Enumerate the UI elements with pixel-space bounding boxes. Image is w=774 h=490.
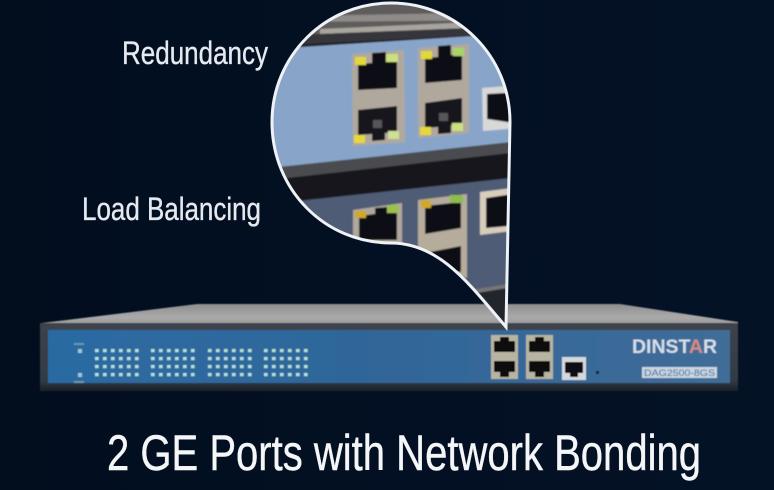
LED group 3 [208, 349, 253, 378]
LED group 1 [95, 349, 140, 378]
port block: OUT / OPS [352, 50, 405, 146]
console port [562, 357, 586, 380]
top chassis stripes [312, 4, 454, 36]
device blue face [48, 330, 730, 383]
reflected console [478, 188, 508, 236]
panel lower bezel [282, 142, 508, 179]
reflected port middle [418, 194, 467, 278]
device top surface [42, 304, 738, 326]
RJ45 port stack 1 [491, 335, 518, 379]
blue front panel [270, 33, 520, 168]
device front frame [40, 323, 738, 391]
brand name: DINSTAR [632, 336, 717, 358]
model label: DAG2500-8GS [644, 368, 715, 378]
LED group 2 [151, 349, 196, 378]
gateway device [40, 304, 738, 391]
port block: AUX / MGMT [418, 44, 469, 138]
bubble white outline [272, 3, 510, 327]
status LEDs [74, 343, 84, 383]
reflected panel [302, 177, 508, 290]
console port [481, 86, 508, 132]
bubble photo contents [274, 4, 508, 323]
reflected port left [352, 202, 403, 242]
RJ45 port stack 2 [526, 335, 553, 379]
label: Redundancy: Redundancy [122, 35, 268, 71]
label: Load Balancing: Load Balancing [82, 191, 261, 227]
magnifier callout bubble [270, 2, 512, 331]
indicator dot [596, 371, 599, 374]
LED group 4 [264, 349, 309, 378]
